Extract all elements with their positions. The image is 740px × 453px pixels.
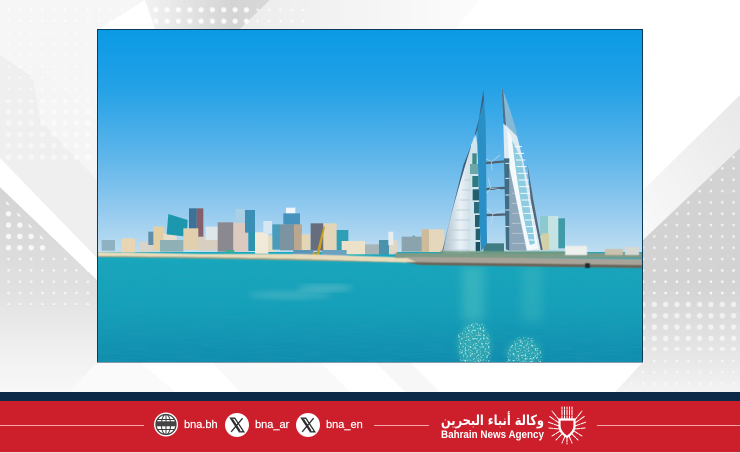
text: agency name Arabic: وكالة أنباء البحرين bbox=[441, 411, 544, 429]
buildings right of the towers bbox=[388, 216, 565, 253]
text: agency name English: Bahrain News Agency bbox=[441, 429, 544, 441]
left tower bbox=[442, 90, 487, 253]
right tower bbox=[502, 87, 543, 251]
sea bbox=[98, 252, 642, 367]
navy stripe bbox=[0, 392, 740, 401]
icon: website globe bbox=[154, 412, 178, 436]
bridges bbox=[486, 154, 506, 224]
trees along the base bbox=[440, 251, 565, 254]
icon: Bahrain World Trade Center twin towers bbox=[442, 87, 543, 253]
text: Arabic account handle: bna_ar bbox=[255, 419, 290, 431]
shoreline bbox=[98, 246, 642, 268]
divider lines bbox=[0, 424, 740, 426]
icon: X logo English account bbox=[296, 413, 320, 437]
red band bbox=[0, 401, 740, 452]
white diagonal band bbox=[0, 158, 97, 280]
sky bbox=[98, 30, 642, 258]
photo frame: Manama skyline and Bahrain World Trade Center bbox=[97, 29, 643, 367]
text: website handle: bna.bh bbox=[184, 419, 218, 431]
icon: X logo Arabic account bbox=[225, 413, 249, 437]
footer bar bbox=[0, 392, 740, 453]
skyline left of the towers bbox=[102, 208, 415, 258]
text: English account handle: bna_en bbox=[326, 419, 363, 431]
icon: Bahrain News Agency emblem bbox=[548, 407, 586, 444]
